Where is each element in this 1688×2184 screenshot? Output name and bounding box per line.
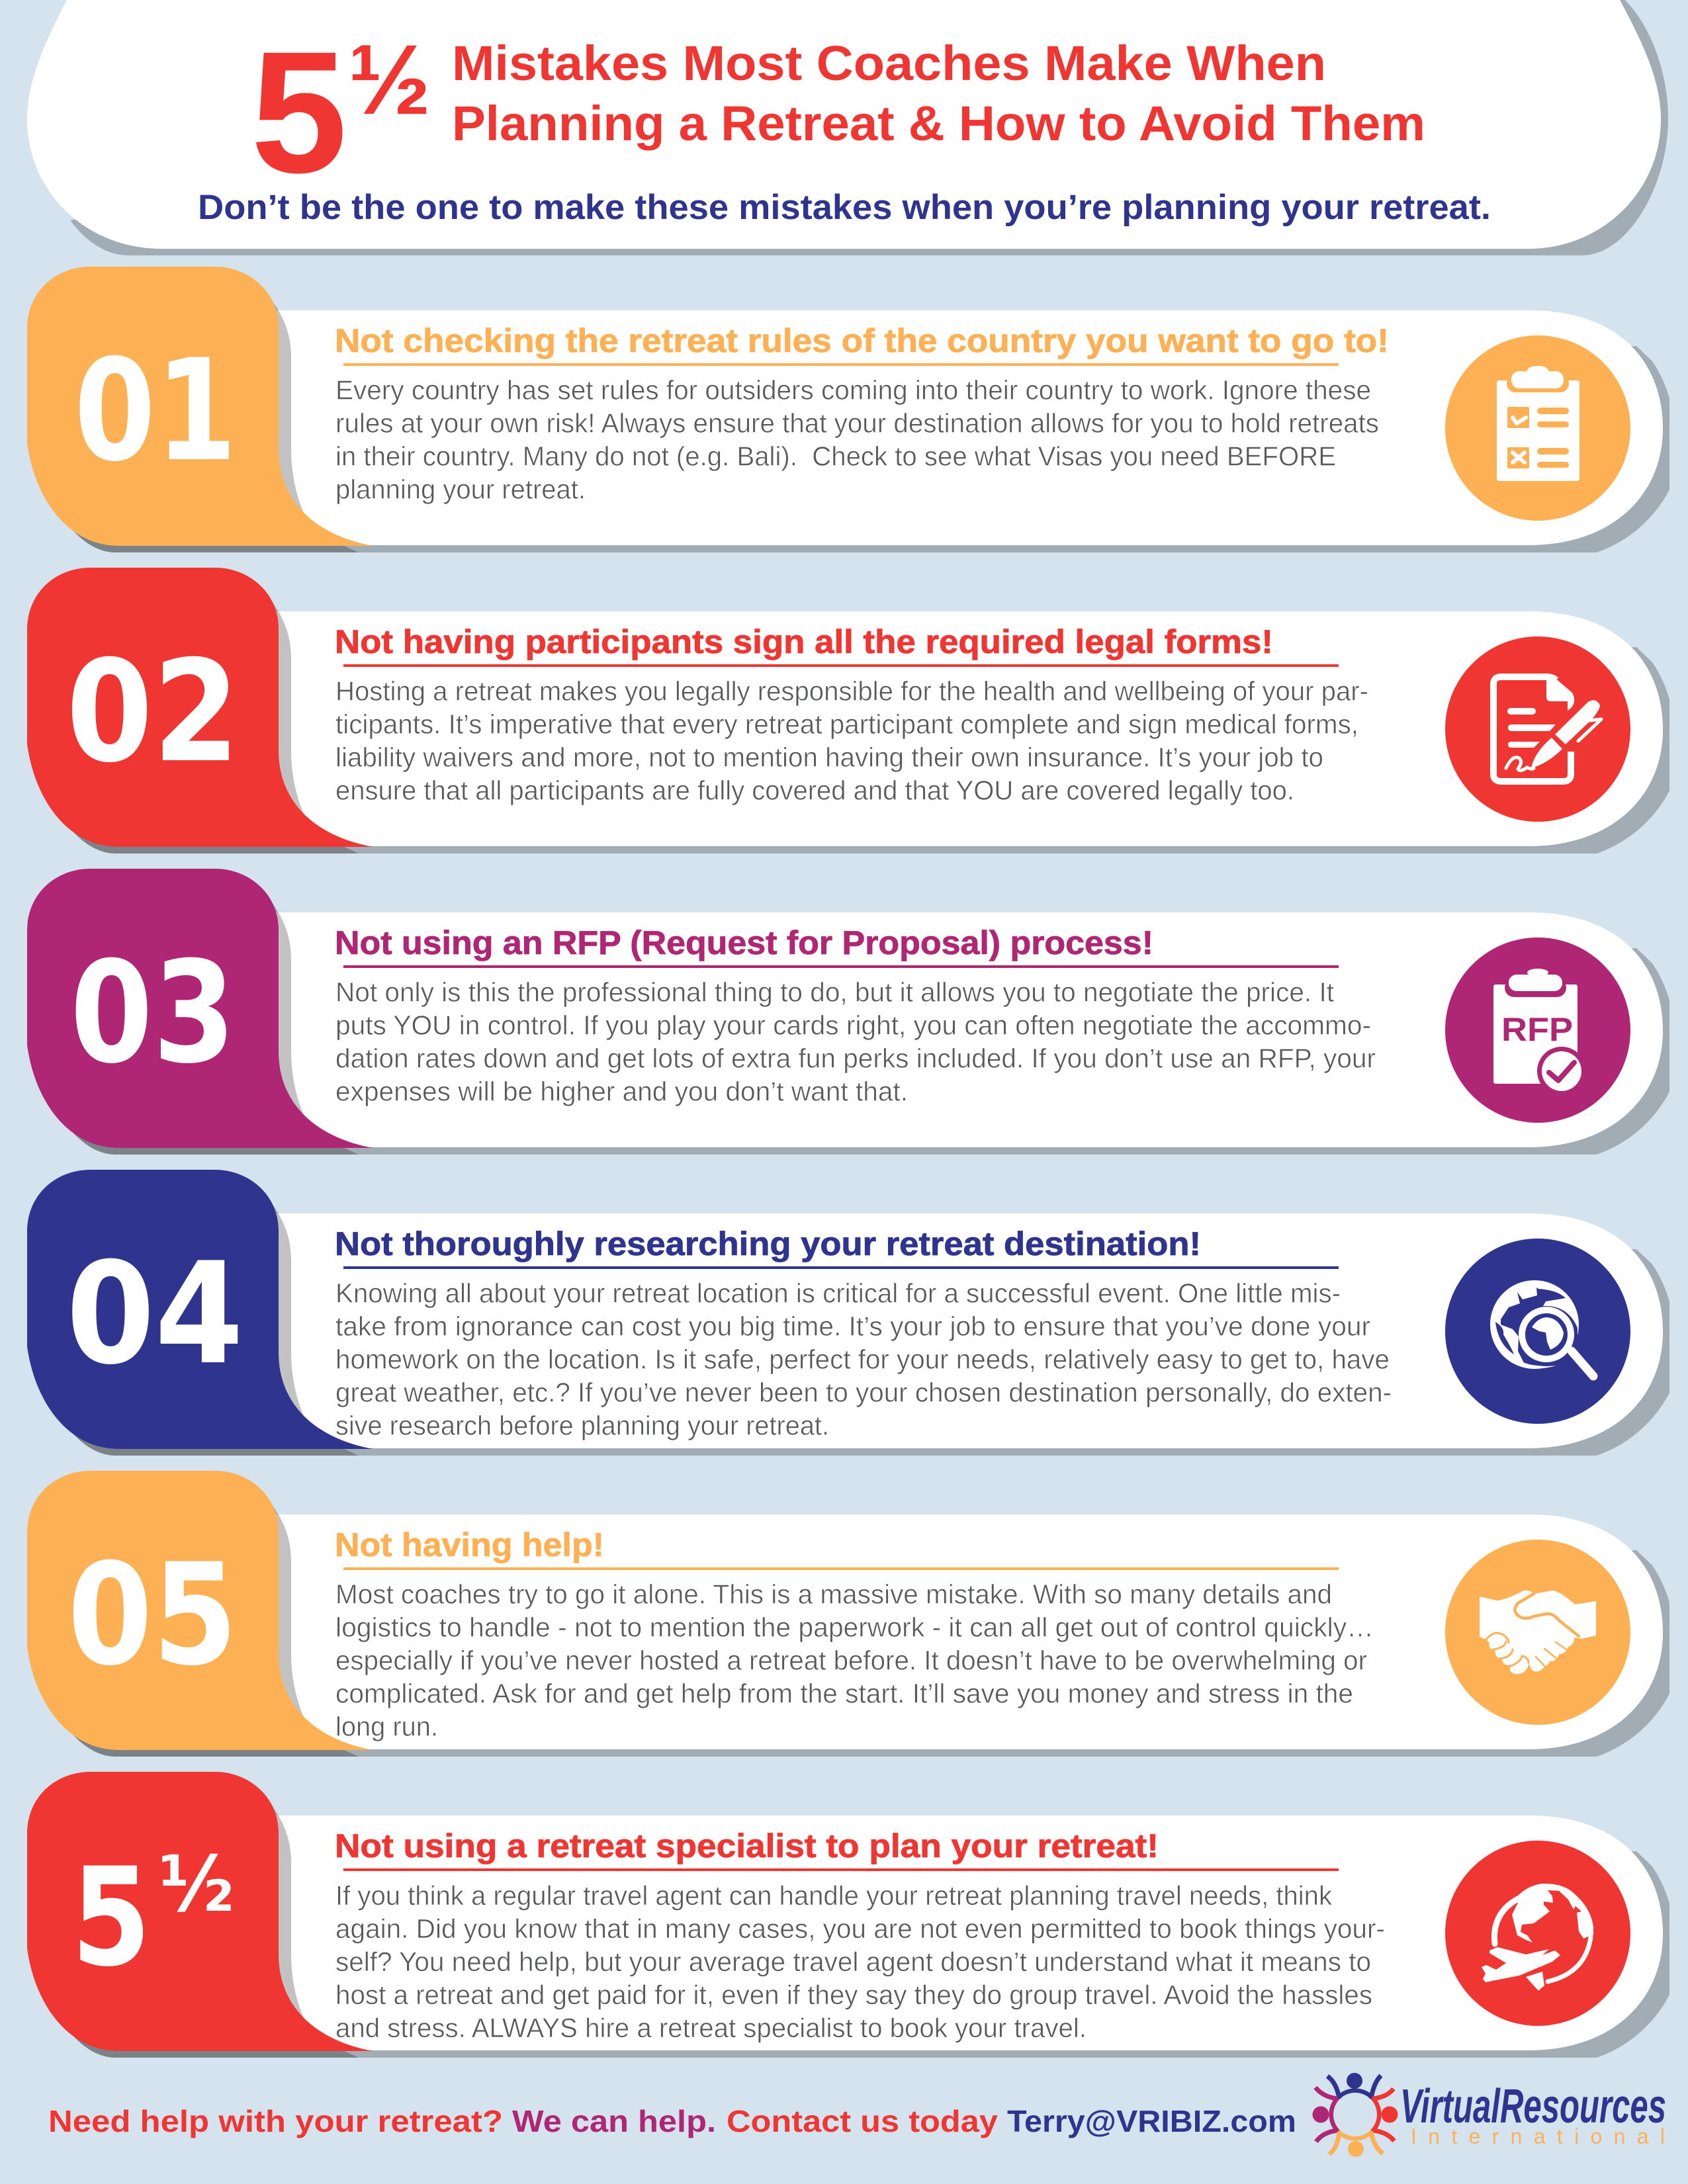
body text 01: Every country has set rules for outsiders coming into their country to work. Ignore these [335, 374, 1371, 405]
body text 03 [335, 977, 1376, 1106]
icon: RFP clipboard [1445, 938, 1630, 1123]
body text 04: take from ignorance can cost you big time. It’s your job to ensure that you’ve done your [335, 1311, 1370, 1342]
title: two headline lines: Planning a Retreat & How to Avoid Them [452, 96, 1425, 151]
body text five and a half: self? You need help, but your average travel agent doesn’t understand what it means to [335, 1946, 1371, 1977]
number tab 04 [27, 1170, 373, 1449]
panel: mistake 02 [27, 568, 1669, 853]
logo: Virtual Resources International [1313, 2073, 1666, 2157]
body text 01: rules at your own risk! Always ensure that your destination allows for you to hold retreats [335, 408, 1379, 438]
body text 03: Not only is this the professional thing to do, but it allows you to negotiate the price. It [335, 977, 1335, 1007]
number tab 02 [27, 568, 373, 847]
body text 05: complicated. Ask for and get help from the start. It’ll save you money and stress in the [335, 1678, 1353, 1708]
heading 02: Not having participants sign all the required legal forms! [335, 623, 1273, 660]
body text 05 [335, 1579, 1374, 1741]
heading 04: Not thoroughly researching your retreat destination! [335, 1225, 1201, 1262]
body text 03: puts YOU in control. If you play your cards right, you can often negotiate the accommo- [335, 1010, 1371, 1040]
body text 05: long run. [335, 1711, 438, 1741]
logo icon: four people around a circle [1313, 2073, 1398, 2157]
body text 05: logistics to handle - not to mention the paperwork - it can all get out of control quickly… [335, 1612, 1374, 1642]
panel: mistake 01 [27, 267, 1669, 552]
number tab five and a half: ½ [159, 1840, 234, 1929]
subtitle: Don’t be the one to make these mistakes when you’re planning your retreat. [198, 188, 1491, 227]
body text 04: homework on the location. Is it safe, perfect for your needs, relatively easy to get to, have [335, 1344, 1390, 1375]
number tab 04: 04 [66, 1232, 244, 1395]
panel: mistake 04 [27, 1170, 1669, 1456]
footer call to action: Need help with your retreat? [48, 2104, 503, 2138]
icon: RFP clipboard: RFP [1501, 1011, 1573, 1048]
logo tagline: International [1411, 2124, 1665, 2148]
number tab five and a half [27, 1772, 373, 2051]
number tab 03: 03 [70, 931, 236, 1094]
title: big five and a half: ½ [348, 24, 431, 135]
body text 02 [335, 676, 1368, 806]
body text 03: dation rates down and get lots of extra fun perks included. If you don’t use an RFP, your [335, 1043, 1376, 1073]
body text 01: planning your retreat. [335, 474, 586, 504]
number tab 05: 05 [67, 1533, 238, 1696]
body text five and a half: If you think a regular travel agent can handle your retreat planning travel needs, think [335, 1880, 1332, 1911]
panel: mistake five and a half [27, 1772, 1669, 2058]
body text five and a half: host a retreat and get paid for it, even if they say they do group travel. Avoid the hassles [335, 1980, 1372, 2010]
body text five and a half: again. Did you know that in many cases, you are not even permitted to book things your- [335, 1913, 1385, 1944]
body text five and a half: and stress. ALWAYS hire a retreat specialist to book your travel. [335, 2013, 1087, 2043]
heading 01: Not checking the retreat rules of the country you want to go to! [335, 322, 1389, 359]
number tab 01 [27, 267, 373, 546]
icon: globe and magnifier [1445, 1239, 1630, 1424]
number tab 05 [27, 1471, 373, 1750]
icon: globe and airplane [1445, 1841, 1630, 2026]
body text 04: great weather, etc.? If you’ve never been to your chosen destination personally, do exten- [335, 1377, 1392, 1408]
body text 03: expenses will be higher and you don’t want that. [335, 1076, 908, 1106]
body text 04: sive research before planning your retreat. [335, 1411, 829, 1441]
title: big five and a half: 5 [251, 15, 347, 209]
panel: mistake 05 [27, 1471, 1669, 1757]
body text 02: liability waivers and more, not to mention having their own insurance. It’s your job to [335, 742, 1323, 773]
icon: handshake [1445, 1540, 1630, 1725]
body text 04 [335, 1278, 1392, 1441]
number tab five and a half: 5 [71, 1839, 151, 1997]
body text 01 [335, 374, 1379, 504]
icon: document and pen [1445, 636, 1630, 822]
number tab 01: 01 [74, 329, 237, 492]
body text 05: especially if you’ve never hosted a retreat before. It doesn’t have to be overwhelming or [335, 1645, 1367, 1675]
body text 01: in their country. Many do not (e.g. Bali). Check to see what Visas you need BEFORE [335, 441, 1336, 471]
number tab 02: 02 [66, 630, 240, 793]
footer call to action: Terry@VRIBIZ.com [1007, 2104, 1296, 2138]
body text 05: Most coaches try to go it alone. This is a massive mistake. With so many details and [335, 1579, 1332, 1609]
heading 03: Not using an RFP (Request for Proposal) process! [335, 924, 1153, 961]
heading 05: Not having help! [335, 1526, 604, 1563]
icon: clipboard checklist [1445, 335, 1630, 521]
title: two headline lines: Mistakes Most Coaches Make When [452, 36, 1326, 91]
panel: header [27, 0, 1668, 255]
body text 02: ensure that all participants are fully covered and that YOU are covered legally too. [335, 775, 1294, 806]
panel: mistake 03 [27, 869, 1669, 1155]
heading five and a half: Not using a retreat specialist to plan your retreat! [335, 1827, 1159, 1864]
footer call to action [48, 2104, 1296, 2138]
body text five and a half [335, 1880, 1385, 2043]
footer call to action: We can help. [512, 2104, 716, 2138]
body text 02: Hosting a retreat makes you legally responsible for the health and wellbeing of your par- [335, 676, 1368, 707]
title: two headline lines [452, 36, 1425, 151]
footer call to action: Contact us today [727, 2104, 998, 2138]
body text 04: Knowing all about your retreat location is critical for a successful event. One little mis- [335, 1278, 1341, 1309]
body text 02: ticipants. It’s imperative that every retreat participant complete and sign medical forms, [335, 709, 1358, 740]
number tab 03 [27, 869, 373, 1148]
